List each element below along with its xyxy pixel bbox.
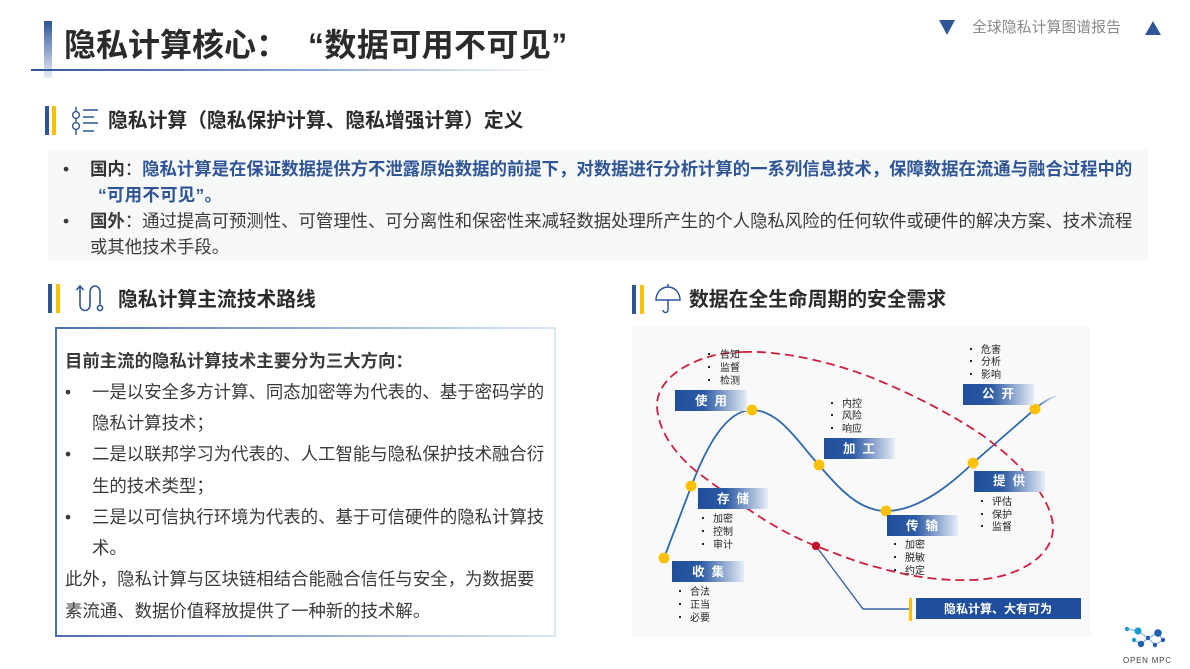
stage: collect: 必要 xyxy=(690,611,710,624)
intro heading: 目前主流的隐私计算技术主要分为三大方向： xyxy=(65,351,413,371)
heading: lifecycle: 数据在全生命周期的安全需求 xyxy=(689,289,946,311)
stage: collect: 收 集 xyxy=(692,564,724,579)
report name: 全球隐私计算图谱报告 xyxy=(972,20,1121,36)
stage: publish: 危害 xyxy=(981,343,1001,356)
panel: tech routes xyxy=(55,327,556,637)
callout: 隐私计算、大有可为 xyxy=(944,601,1052,616)
icon: down triangle xyxy=(939,20,955,35)
stage: transfer: 传 输 xyxy=(906,518,938,533)
heading: definition: 隐私计算（隐私保护计算、隐私增强计算）定义 xyxy=(108,110,523,132)
item 3: • xyxy=(65,507,71,527)
title: 隐私计算核心： “数据可用不可见” xyxy=(64,27,568,63)
item 2: • xyxy=(65,444,71,464)
stage: store: 存 储 xyxy=(717,491,749,506)
stage: store: 审计 xyxy=(713,538,733,551)
stage: process: 加 工 xyxy=(843,442,875,456)
title underline xyxy=(31,69,556,71)
stage: transfer: 加密 xyxy=(905,538,925,551)
text: foreign definition: 国外：通过提高可预测性、可管理性、可分离性和保密性来减轻数据处理所产生的个人隐私风险的任何软件或硬件的解决方案、技术流程 xyxy=(90,211,1132,231)
stage: store xyxy=(698,488,768,551)
stage: provide: 保护 xyxy=(992,508,1012,521)
item 1 line 2: 隐私计算技术； xyxy=(92,413,214,433)
text: foreign definition line 2: 或其他技术手段。 xyxy=(90,237,229,257)
closing line 1: 此外，隐私计算与区块链相结合能融合信任与安全，为数据要 xyxy=(65,569,535,589)
title accent bar xyxy=(44,21,52,78)
stage: provide: 提 供 xyxy=(993,473,1025,488)
red dashed loop xyxy=(657,352,1053,580)
stage: transfer: 脱敏 xyxy=(905,551,925,564)
item 2 line 2: 生的技术类型； xyxy=(92,476,214,496)
lifecycle curve xyxy=(664,396,1056,558)
heading: tech routes: 隐私计算主流技术路线 xyxy=(118,289,316,311)
section marker: definition xyxy=(45,106,56,135)
stage: collect: 正当 xyxy=(690,598,710,611)
stage: transfer xyxy=(887,515,958,577)
icon: list xyxy=(72,107,98,135)
bullet: domestic: • xyxy=(63,159,69,179)
panel: definition xyxy=(48,150,1148,261)
stage: collect: 合法 xyxy=(690,585,710,598)
callout connector xyxy=(816,546,910,609)
stage: provide: 评估 xyxy=(992,495,1012,508)
stage: provide xyxy=(974,471,1045,533)
text: domestic definition line 2: “可用不可见”。 xyxy=(98,185,222,205)
stage: use: 检测 xyxy=(720,374,740,387)
item 2: 二是以联邦学习为代表的、人工智能与隐私保护技术融合衍 xyxy=(92,444,544,464)
logo: Open MPC: OPEN MPC xyxy=(1123,656,1171,665)
stage: use: 告知 xyxy=(720,348,740,361)
stage: transfer: 约定 xyxy=(905,564,925,577)
logo: Open MPC xyxy=(1123,626,1171,665)
stage: publish xyxy=(963,343,1034,405)
stage: use: 使 用 xyxy=(695,393,727,408)
stage: publish: 影响 xyxy=(981,368,1001,381)
callout xyxy=(909,598,1081,621)
chart: data lifecycle diagram xyxy=(656,343,1081,624)
stage: use xyxy=(675,348,747,411)
item 3: 三是以可信执行环境为代表的、基于可信硬件的隐私计算技 xyxy=(92,507,544,527)
item 3 line 2: 术。 xyxy=(92,538,127,558)
stage: collect xyxy=(672,561,744,624)
stage: provide: 监督 xyxy=(992,520,1012,533)
stage: use: 监督 xyxy=(720,361,740,374)
icon: up triangle xyxy=(1145,21,1161,35)
stage: process xyxy=(824,397,895,459)
stage: process: 响应 xyxy=(842,422,862,435)
item 1: • xyxy=(65,382,71,402)
stage: process: 风险 xyxy=(842,409,862,422)
icon: umbrella xyxy=(655,284,681,314)
item 1: 一是以安全多方计算、同态加密等为代表的、基于密码学的 xyxy=(92,382,544,402)
stage dots xyxy=(659,404,1040,563)
stage: store: 控制 xyxy=(713,525,733,538)
stage: process: 内控 xyxy=(842,397,862,410)
header tag xyxy=(939,19,1161,36)
text: domestic definition: 国内：隐私计算是在保证数据提供方不泄露原始数据的前提下，对数据进行分析计算的一系列信息技术，保障数据在流通与融合过程中的 xyxy=(90,159,1132,179)
stage: publish: 公 开 xyxy=(982,387,1014,401)
closing line 2: 素流通、数据价值释放提供了一种新的技术解。 xyxy=(65,601,430,621)
stage: store: 加密 xyxy=(713,512,733,525)
red dot xyxy=(812,542,820,550)
bullet: foreign: • xyxy=(63,211,69,231)
section marker: tech routes xyxy=(48,284,60,313)
stage: publish: 分析 xyxy=(981,355,1001,368)
icon: route xyxy=(76,284,104,312)
section marker: lifecycle xyxy=(632,285,644,314)
